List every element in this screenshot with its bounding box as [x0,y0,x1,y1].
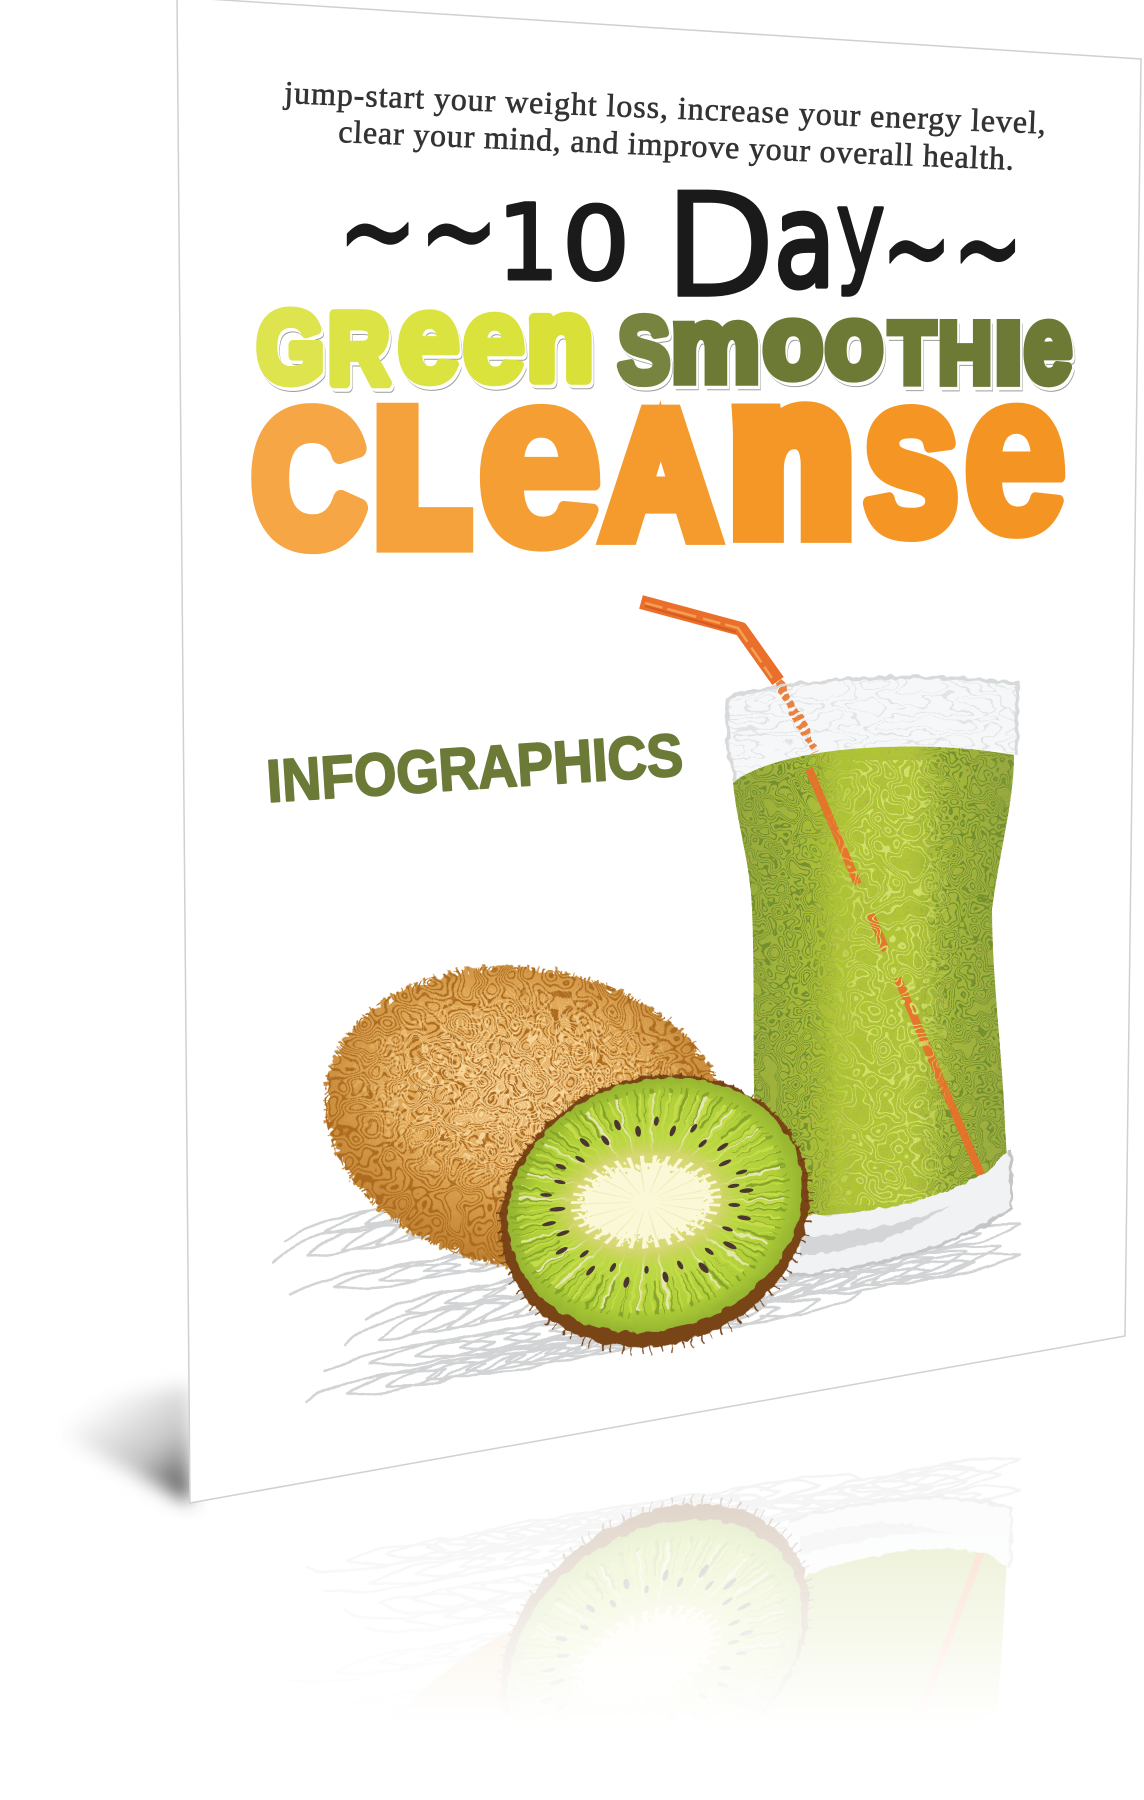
title line: Cleanse: L [377,377,467,579]
title line: Green: n [530,280,595,408]
title line: Cleanse: A [603,375,719,574]
title line: Green: G [257,291,324,403]
brown skin [462,1032,848,1390]
skin hairs [462,1034,848,1394]
title line: Green: R [330,297,392,409]
title line: Green: R [330,296,391,408]
title line: Smoothie: o [763,285,823,399]
panel: tilted white paper [177,0,1141,1503]
drop shadow behind paper corner [15,1385,190,1503]
tagline [283,74,1047,177]
fuzzy skin base [302,937,754,1299]
title line: Smoothie: m [673,289,762,407]
title line: Smoothie: m [671,286,760,404]
tagline: jump-start your weight loss, increase your energy level, [283,74,1047,141]
title line: 10 Day: 1 [497,182,559,304]
title line: Cleanse: n [731,335,852,576]
title line: Cleanse: C [253,375,365,583]
title line: Smoothie: T [891,309,938,406]
heading: INFOGRAPHICS: INFOGRAPHICS [265,721,685,815]
light fibres [327,962,713,1218]
title line: Smoothie: S [618,299,670,403]
title line: Smoothie: o [827,288,885,402]
title line: 10 Day: ~~ [337,151,500,309]
title line: Green [257,270,595,413]
seeds [532,1106,762,1296]
title line: Smoothie: H [940,308,994,406]
icon: smoothie glass [641,602,1020,1276]
title line: Cleanse: e [963,325,1067,580]
title line: Smoothie: m [674,290,762,408]
green smoothie body [725,740,1020,1230]
title line: Smoothie: o [828,289,886,403]
title line: Green: e [464,274,527,410]
title line: Smoothie: o [766,290,825,404]
title line: Green: e [400,274,462,413]
title line: Smoothie: o [765,289,825,403]
title line: Green: e [398,270,460,408]
title line: Smoothie: e [1026,289,1074,409]
tagline: clear your mind, and improve your overall health. [338,113,1015,177]
green flesh [472,1037,838,1373]
sketched table shadow [273,1173,1020,1402]
title line: 10 Day: ~~ [881,168,1023,326]
glass base [770,1148,1012,1276]
title line: Green: n [529,279,595,407]
title line: Cleanse: s [862,328,960,582]
title line: Smoothie: H [938,305,992,402]
title line: Smoothie: e [1024,284,1072,405]
title line: Green: e [462,271,525,407]
hair fringe [302,937,754,1299]
title line: Green: G [260,296,326,407]
title line: Cleanse: e [477,321,602,596]
icon: halved kiwi fruit [462,1032,848,1394]
title line: Smoothie [618,284,1074,409]
reflection of the artwork below the paper [376,1457,1021,1692]
title line: Smoothie: o [825,285,883,399]
title line: Green: G [259,295,326,406]
title line: Smoothie: I [994,304,1022,402]
title line: Green: n [527,275,593,404]
title line: Smoothie: S [620,303,673,407]
title line: Smoothie: S [620,302,672,406]
title line: Smoothie: T [889,305,936,402]
title line: 10 Day: y [836,164,885,299]
title line: 10 Day: D [664,162,776,331]
title line: Smoothie: e [1026,288,1074,408]
title line: Smoothie: I [996,308,1024,405]
straw above rim [641,602,778,681]
title line: Smoothie: H [940,309,995,407]
cream core [545,1130,747,1274]
title line: Smoothie: T [892,310,938,407]
title line: Green: R [328,292,389,405]
title line: 10 Day: a [774,166,835,317]
title line: 10 Day: 0 [562,185,630,303]
title line: Green: e [465,275,527,411]
title line: Smoothie: I [997,309,1025,406]
title line: Green: e [400,273,462,412]
dark fibres [300,935,756,1301]
icon: whole kiwi fruit [300,935,756,1301]
glass rim [727,677,1018,782]
title line: Cleanse [253,321,1067,596]
title line: 10 Day [337,151,1023,331]
